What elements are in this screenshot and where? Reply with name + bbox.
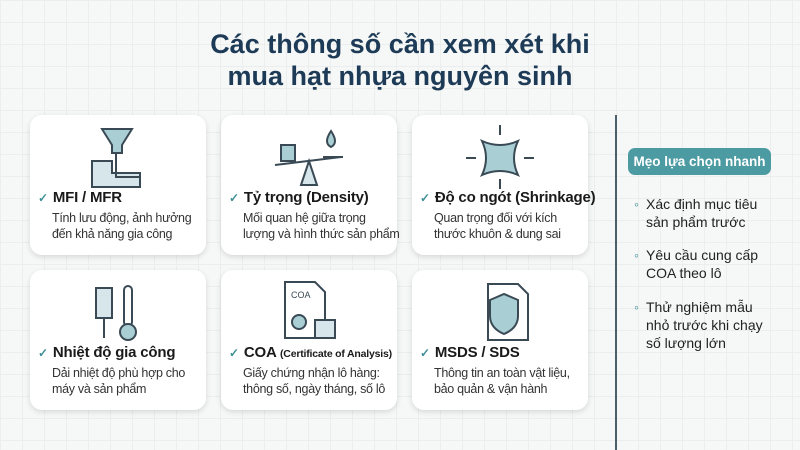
text: Thông tin an toàn vật liệu, (434, 366, 570, 380)
heading: ✓ Nhiệt độ gia công (38, 344, 175, 361)
title: mua hạt nhựa nguyên sinh (227, 61, 573, 91)
text (243, 211, 400, 241)
text (434, 366, 570, 396)
tip 1: Xác định mục tiêu (646, 196, 757, 212)
tip 1: ◦ (634, 196, 639, 212)
text: thông số, ngày tháng, số lô (243, 382, 385, 396)
text (434, 211, 561, 241)
text: đến khả năng gia công (52, 227, 172, 241)
tip 1: sản phẩm trước (646, 214, 745, 230)
card: MSDS (412, 270, 588, 410)
tip 2: COA theo lô (646, 265, 722, 281)
card: temperature (30, 270, 206, 410)
tips heading pill (628, 148, 771, 175)
text: máy và sản phẩm (52, 382, 146, 396)
heading: ✓ Tỷ trọng (Density) (229, 189, 369, 206)
tip 3 (634, 299, 763, 351)
title: Các thông số cần xem xét khi (210, 29, 590, 59)
text: thước khuôn & dung sai (434, 227, 561, 241)
icon: thermometer (95, 285, 137, 341)
tip 3: nhỏ trước khi chạy (646, 317, 763, 333)
text: Giấy chứng nhận lô hàng: (243, 366, 380, 380)
icon: certificate (284, 281, 336, 339)
card: shrinkage (412, 115, 588, 255)
text: Tính lưu động, ảnh hưởng (52, 211, 191, 225)
card: density (221, 115, 397, 255)
tip 1 (634, 196, 757, 230)
tip 2: ◦ (634, 247, 639, 263)
text: bảo quản & vận hành (434, 382, 547, 396)
text (243, 366, 385, 396)
text: Mối quan hệ giữa trọng (243, 211, 366, 225)
text: Quan trọng đối với kích (434, 211, 557, 225)
text: Dải nhiệt độ phù hợp cho (52, 366, 185, 380)
tip 3: số lượng lớn (646, 335, 726, 351)
text: lượng và hình thức sản phẩm (243, 227, 400, 241)
card: COA (221, 270, 397, 410)
text (52, 366, 185, 396)
heading: ✓ MSDS / SDS (420, 344, 520, 361)
tip 3: ◦ (634, 299, 639, 315)
tips heading pill: Mẹo lựa chọn nhanh (633, 154, 766, 169)
divider (615, 115, 617, 450)
title (210, 29, 590, 91)
tip 2 (634, 247, 758, 281)
text (52, 211, 191, 241)
tip 2: Yêu cầu cung cấp (646, 247, 758, 263)
heading: ✓ MFI / MFR (38, 189, 122, 206)
icon: safety sheet (487, 283, 529, 341)
heading: ✓ COA (Certificate of Analysis) (229, 344, 392, 361)
icon: funnel (91, 128, 141, 188)
icon: scale (274, 129, 343, 186)
card: MFI (30, 115, 206, 255)
icon: certificate: COA (291, 290, 311, 300)
icon: shrink (466, 125, 534, 189)
heading: ✓ Độ co ngót (Shrinkage) (420, 189, 595, 206)
tip 3: Thử nghiệm mẫu (646, 299, 753, 315)
